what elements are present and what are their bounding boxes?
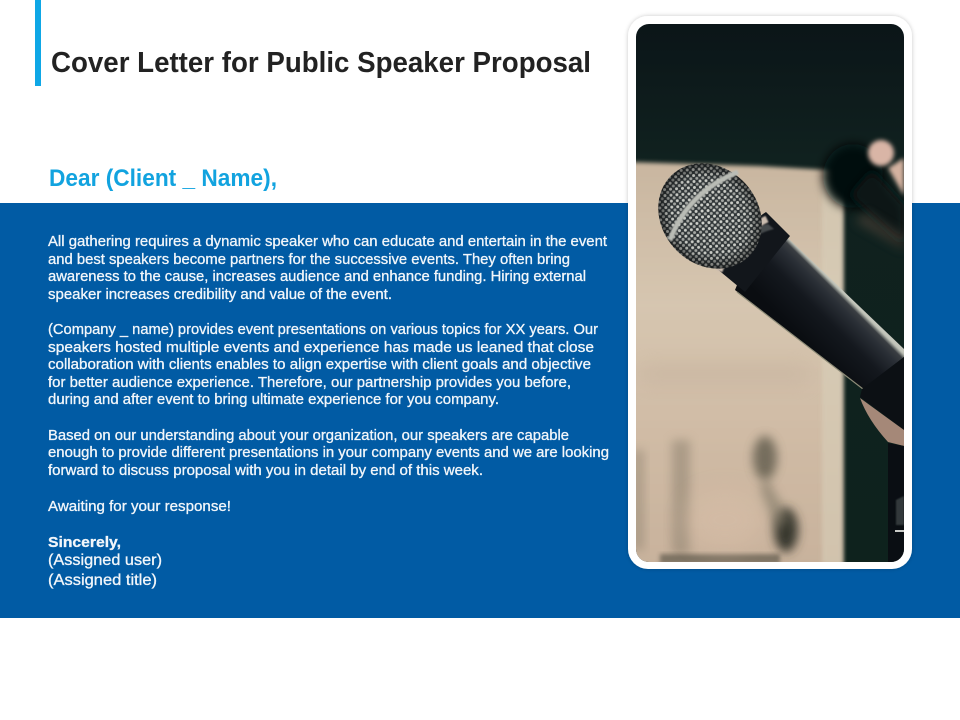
paragraph: understanding: enough to provide different presentations in your company events and we are looking (48, 445, 609, 461)
sign-off: (Assigned user) (48, 552, 162, 569)
paragraph: company: speakers hosted multiple events and experience has made us leaned that close (48, 340, 594, 356)
mic grille (658, 163, 762, 269)
paragraph: company: during and after event to bring ultimate experience for you company. (48, 392, 499, 408)
paragraph: introduction: awareness to the cause, increases audience and enhance funding. Hiring external (48, 269, 586, 285)
sign-off: Sincerely, (48, 535, 121, 551)
paragraph: introduction: All gathering requires a dynamic speaker who can educate and entertain in the event (48, 234, 607, 250)
title accent bar (35, 0, 41, 86)
handle lower section (860, 357, 904, 430)
paragraph: understanding: Based on our understanding about your organization, our speakers are capable (48, 428, 569, 444)
dark background (636, 24, 904, 562)
photo frame (628, 16, 912, 569)
paragraph: introduction: speaker increases credibility and value of the event. (48, 287, 392, 303)
mic handle (735, 238, 904, 388)
paragraph: introduction (48, 234, 607, 303)
closing line: Awaiting for your response! (48, 499, 231, 515)
photo: microphone (630, 24, 904, 570)
blue band (0, 203, 960, 618)
salutation heading: Dear (Client _ Name), (49, 165, 277, 192)
paragraph: introduction: and best speakers become partners for the successive events. They often bring (48, 252, 570, 268)
paragraph: company: (Company _ name) provides event presentations on various topics for XX years. Our (48, 322, 598, 338)
background blurred stand (823, 140, 904, 250)
title: Cover Letter for Public Speaker Proposal (51, 47, 591, 79)
letter body text (48, 234, 609, 589)
sign-off (48, 535, 162, 589)
paragraph: understanding: forward to discuss proposal with you in detail by end of this week. (48, 463, 483, 479)
paragraph: company (48, 322, 598, 408)
paragraph: understanding (48, 428, 609, 479)
sign-off: (Assigned title) (48, 572, 157, 589)
blurred shadows in panel (632, 180, 843, 565)
paragraph: company: collaboration with clients enables to align expertise with client goals and objective (48, 357, 591, 373)
beige blurred panel (630, 162, 843, 570)
mic collar (716, 212, 790, 292)
paragraph: company: for better audience experience. Therefore, our partnership provides you before, (48, 375, 571, 391)
